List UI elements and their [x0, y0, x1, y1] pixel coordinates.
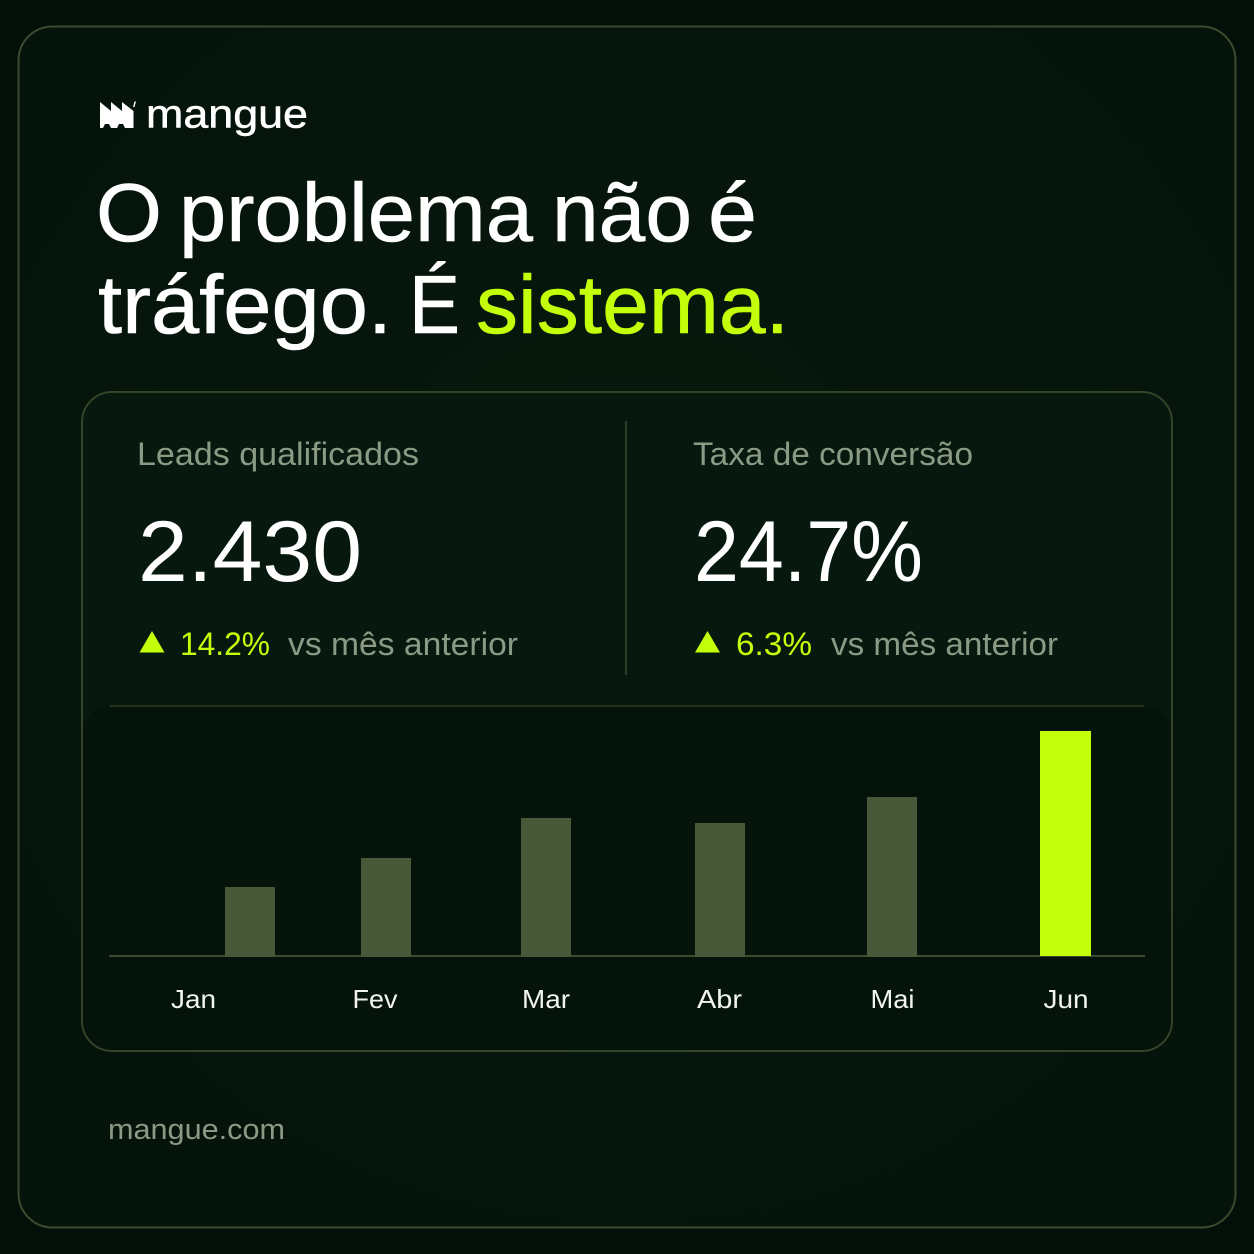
- bar: Fev: [361, 858, 411, 957]
- month labels: Abr: [697, 984, 742, 1014]
- icon: up triangle: [695, 631, 720, 652]
- bar: Mai: [867, 797, 917, 957]
- metric: leads qualificados: [137, 436, 518, 662]
- metric: leads qualificados: Leads qualificados: [137, 436, 419, 472]
- metric: taxa de conversao: 6.3%: [736, 626, 812, 662]
- bar: Jan: [225, 887, 275, 957]
- title: É: [409, 258, 460, 351]
- metric: leads qualificados: 14.2%: [180, 626, 270, 662]
- footer url: mangue.com: [108, 1114, 285, 1146]
- logo: [100, 92, 308, 136]
- bar: Mar: [521, 818, 571, 957]
- bar: Jun: [1040, 731, 1091, 956]
- metric: leads qualificados: vs mês anterior: [288, 626, 518, 662]
- title: não: [552, 166, 692, 259]
- metric: taxa de conversao: vs mês anterior: [831, 626, 1058, 662]
- month labels: Mar: [522, 984, 570, 1014]
- title: sistema.: [476, 258, 789, 351]
- icon: up triangle: [140, 631, 164, 652]
- title: problema: [179, 166, 534, 259]
- metric: leads qualificados: 2.430: [138, 504, 362, 600]
- title: tráfego.: [98, 258, 392, 351]
- icon: logo mark: [100, 102, 136, 128]
- metric: taxa de conversao: 24.7%: [694, 504, 923, 600]
- bar: Abr: [695, 823, 745, 957]
- panel: metrics and chart card: [82, 392, 1172, 1051]
- month labels: [171, 984, 1088, 1014]
- title: é: [708, 166, 757, 259]
- title: O: [96, 166, 162, 259]
- metric: taxa de conversao: [693, 436, 1058, 662]
- logo wordmark: mangue: [146, 92, 308, 136]
- metric: taxa de conversao: Taxa de conversão: [693, 436, 973, 472]
- month labels: Fev: [352, 984, 398, 1014]
- month labels: Jan: [171, 984, 216, 1014]
- month labels: Mai: [870, 984, 914, 1014]
- month labels: Jun: [1044, 984, 1088, 1014]
- title: [96, 166, 789, 351]
- bar chart: [82, 705, 1172, 1051]
